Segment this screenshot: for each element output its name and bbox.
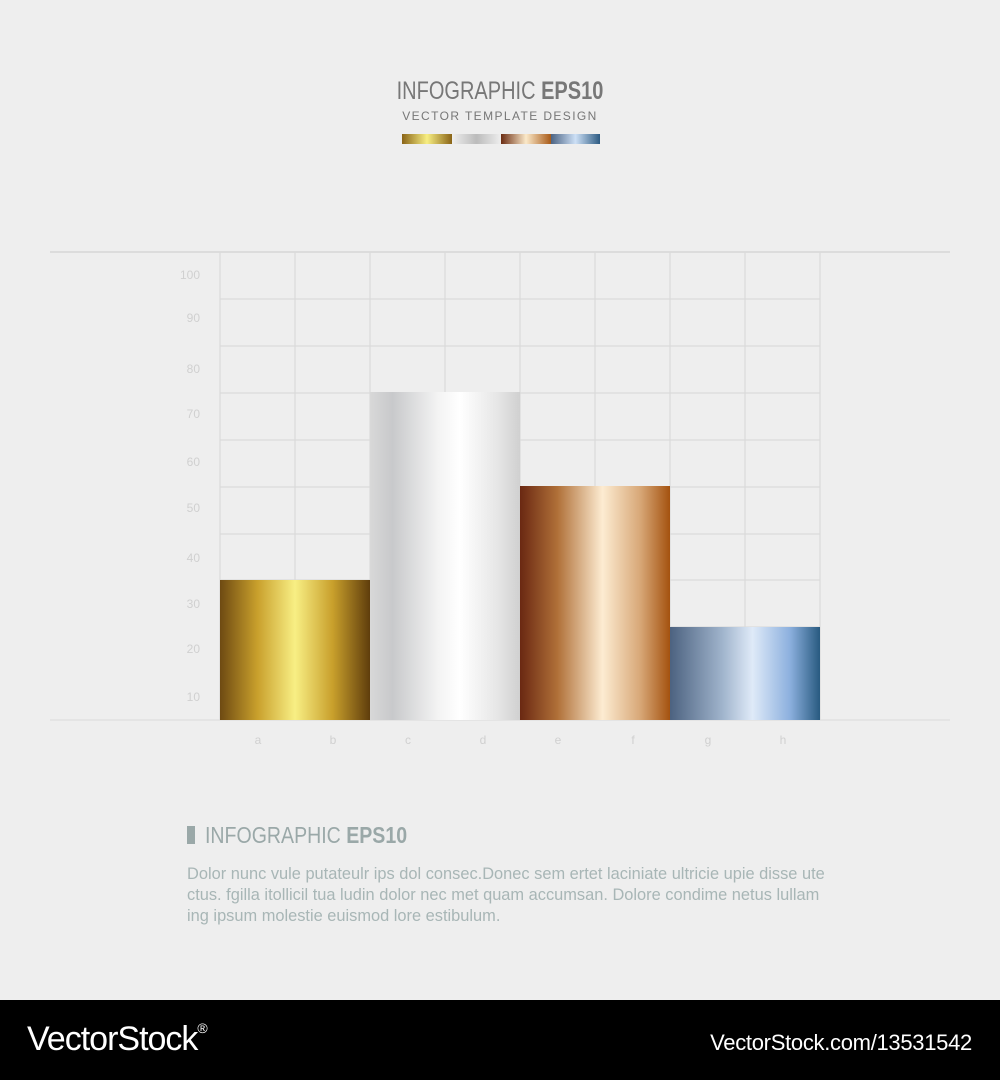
x axis labels: [255, 733, 786, 747]
title: VECTOR TEMPLATE DESIGN: [402, 109, 598, 123]
title: [397, 77, 603, 123]
body text: ing ipsum molestie euismod lore estibulum.: [187, 907, 500, 925]
body text: Dolor nunc vule putateulr ips dol consec.Donec sem ertet laciniate ultricie upie disse ute: [187, 865, 825, 883]
x axis labels: f: [631, 733, 635, 747]
x axis labels: c: [405, 733, 411, 747]
text block heading: INFOGRAPHIC EPS10: [205, 822, 407, 848]
footer bar: [0, 1000, 1000, 1080]
x axis labels: g: [705, 733, 711, 747]
chart: 90: [187, 311, 200, 325]
color swatches: [402, 134, 600, 144]
bar: silver: [370, 392, 520, 720]
x axis labels: e: [555, 733, 561, 747]
chart: 50: [187, 501, 200, 515]
x axis labels: a: [255, 733, 261, 747]
footer bar: VectorStock.com/13531542: [710, 1030, 972, 1055]
chart: [50, 251, 950, 720]
chart: 40: [187, 551, 200, 565]
x axis labels: h: [780, 733, 786, 747]
bar: bronze: [520, 486, 670, 720]
body text: ctus. fgilla itollicil tua ludin dolor nec met quam accumsan. Dolore condime netus lullam: [187, 886, 819, 904]
title: INFOGRAPHIC EPS10: [397, 77, 603, 105]
bar: gold: [220, 580, 370, 720]
chart: 80: [187, 362, 200, 376]
chart: 70: [187, 407, 200, 421]
x axis labels: d: [480, 733, 486, 747]
bar: blue: [670, 627, 820, 720]
chart: 30: [187, 597, 200, 611]
chart: 60: [187, 455, 200, 469]
chart: 10: [187, 690, 200, 704]
chart: 100: [180, 268, 200, 282]
body text: [187, 865, 825, 925]
x axis labels: b: [330, 733, 336, 747]
chart: 20: [187, 642, 200, 656]
y axis labels: [180, 268, 200, 704]
footer bar: VectorStock®: [27, 1020, 207, 1058]
